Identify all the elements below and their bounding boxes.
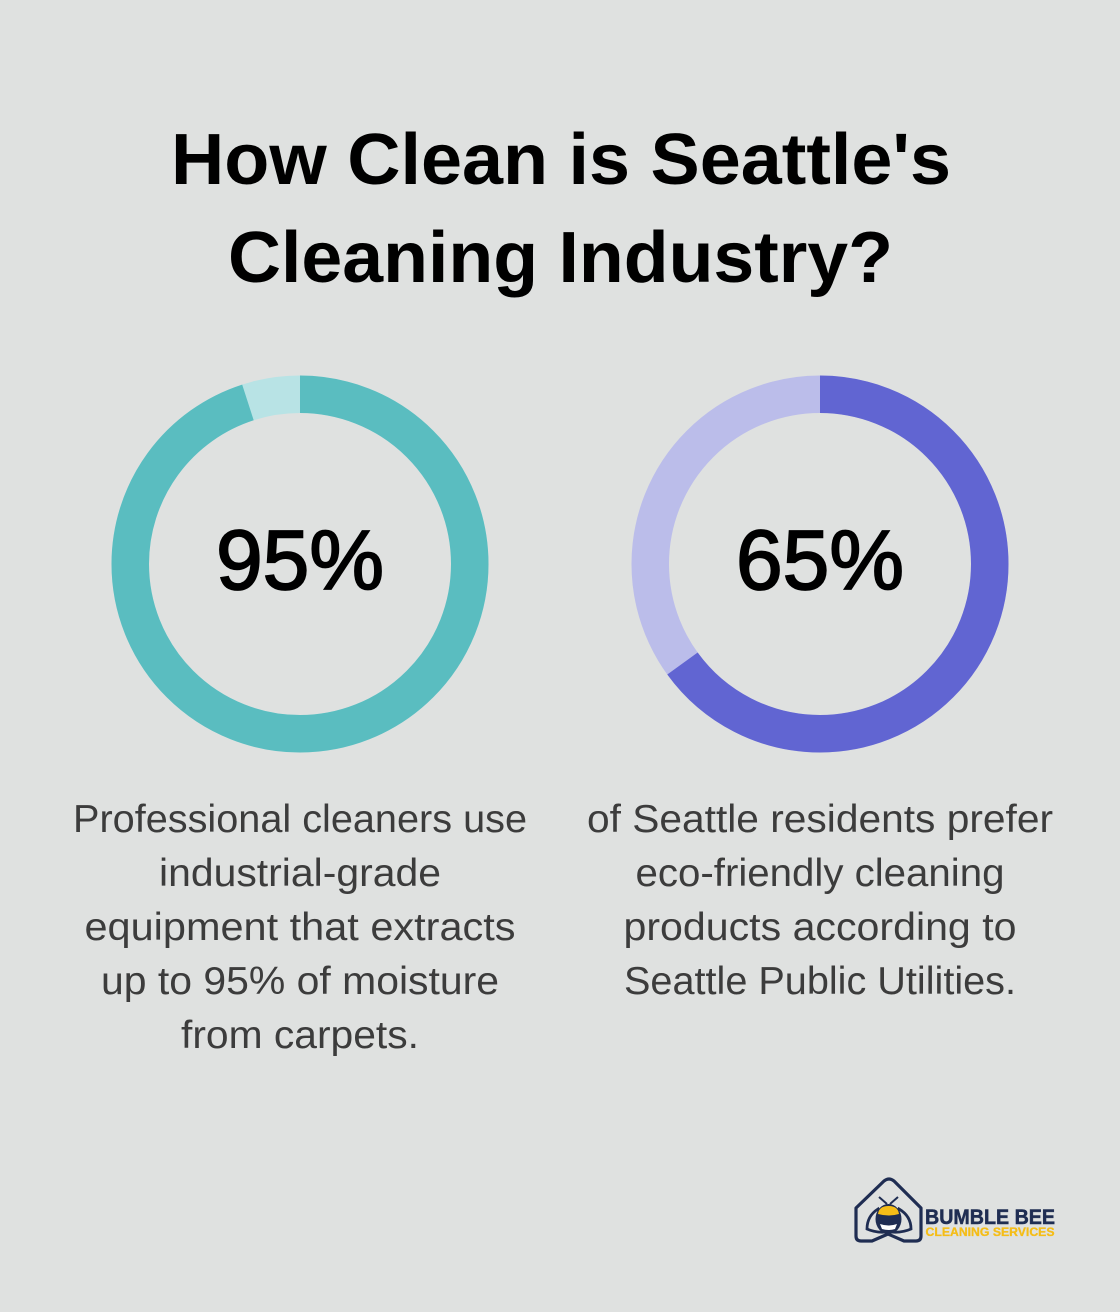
- logo wordmark: [925, 1206, 1055, 1239]
- logo wordmark: CLEANING SERVICES: [926, 1225, 1054, 1239]
- value: 95%: 95%: [216, 513, 384, 607]
- title: How Clean is Seattle's: [171, 120, 951, 200]
- description: eco-friendly preference: eco-friendly cleaning: [636, 852, 1004, 895]
- donut chart: 65%: [650, 394, 990, 734]
- description: eco-friendly preference: Seattle Public Utilities.: [624, 960, 1016, 1003]
- description: eco-friendly preference: [587, 798, 1053, 1003]
- description: eco-friendly preference: products according to: [624, 906, 1016, 949]
- title: Cleaning Industry?: [228, 218, 893, 298]
- value: 65%: 65%: [736, 513, 904, 607]
- panel: 65% stat: [587, 394, 1053, 1003]
- logo: Bumble Bee Cleaning Services: [856, 1179, 1055, 1241]
- description: moisture extraction: [73, 798, 527, 1057]
- description: moisture extraction: equipment that extracts: [84, 906, 516, 949]
- description: moisture extraction: Professional cleaners use: [73, 798, 527, 841]
- logo wordmark: BUMBLE BEE: [925, 1206, 1055, 1229]
- panel: 95% stat: [73, 394, 527, 1057]
- description: moisture extraction: up to 95% of moisture: [101, 960, 499, 1003]
- description: moisture extraction: from carpets.: [181, 1014, 419, 1057]
- title: [171, 120, 951, 298]
- description: eco-friendly preference: of Seattle residents prefer: [587, 798, 1053, 841]
- icon: house outline with bee: [856, 1179, 921, 1241]
- description: moisture extraction: industrial-grade: [159, 852, 441, 895]
- donut chart: 95%: [130, 394, 470, 734]
